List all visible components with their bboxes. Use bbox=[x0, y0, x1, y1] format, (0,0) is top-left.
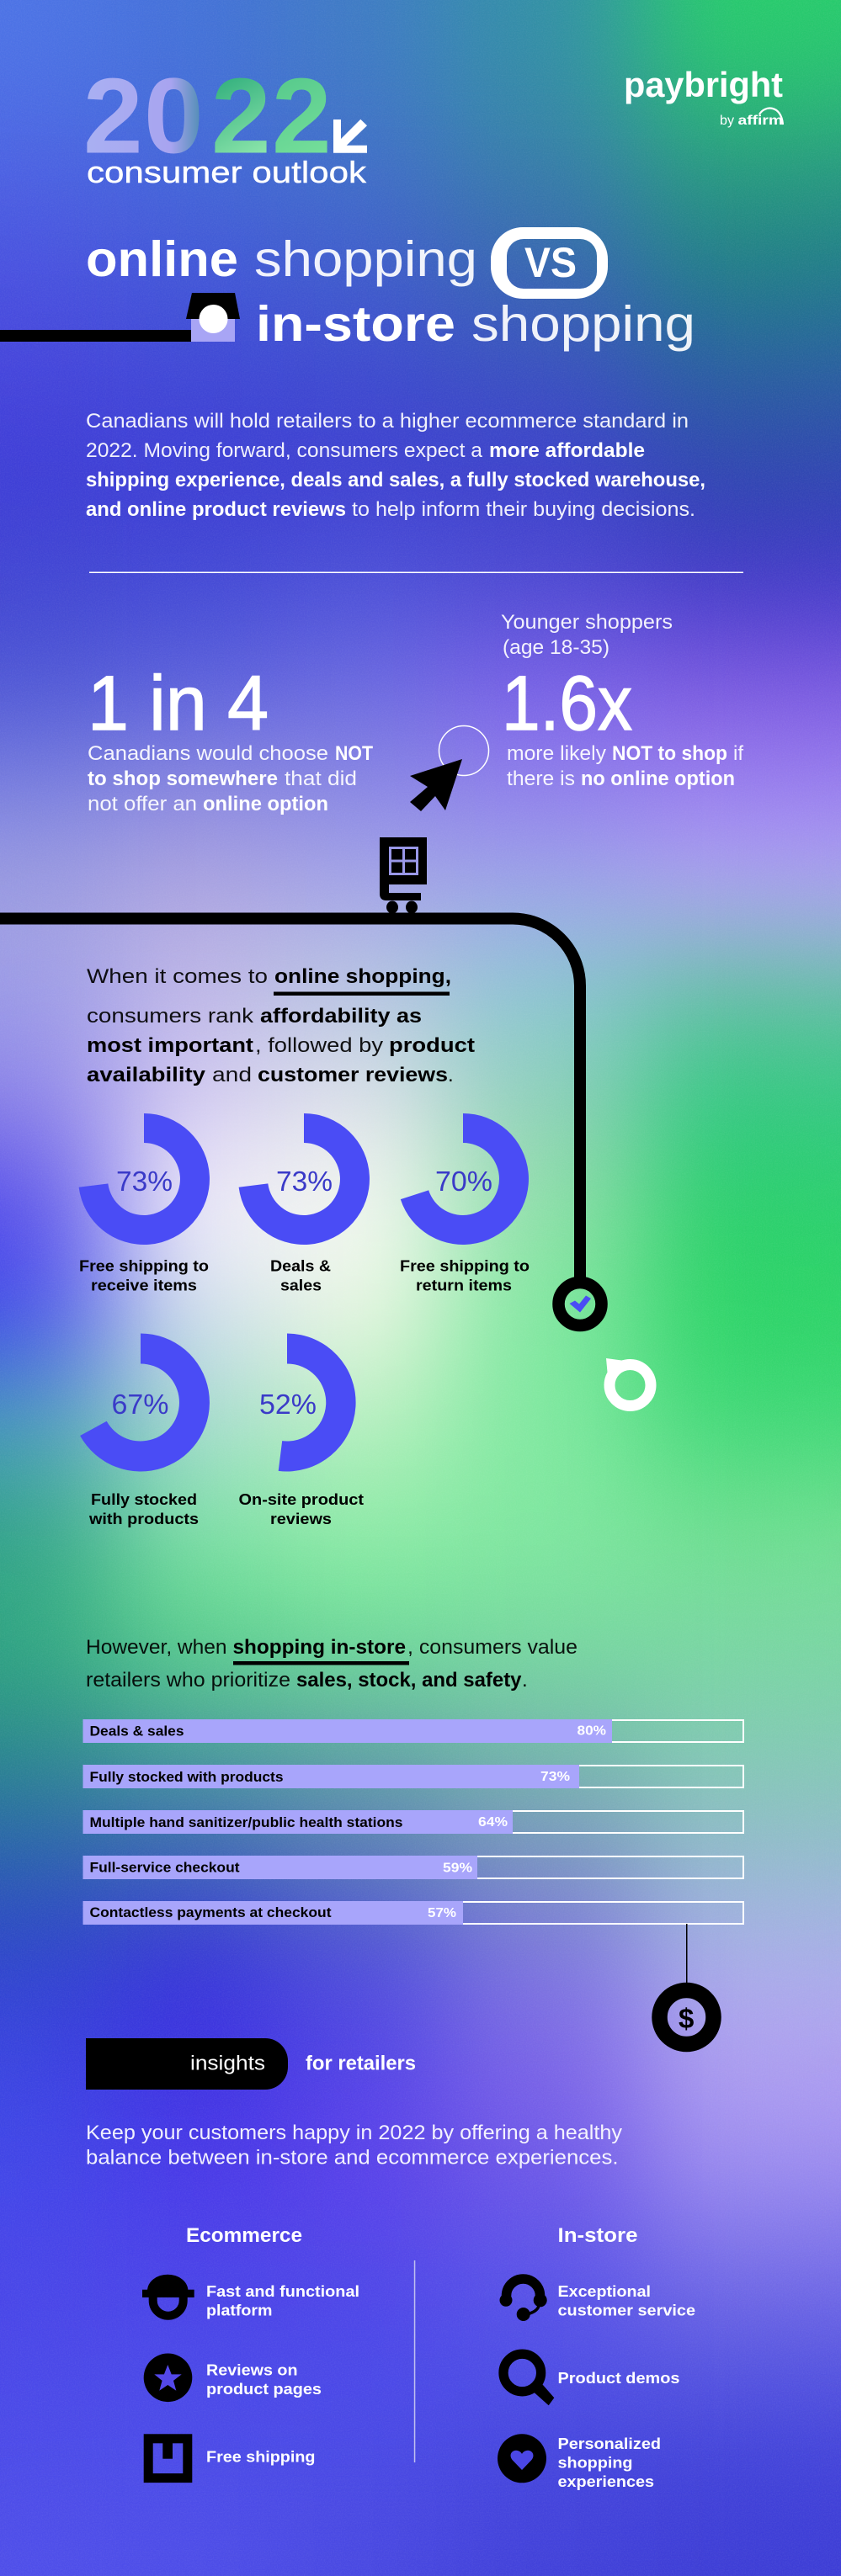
bar: fully stocked with products 73%: 73% bbox=[540, 1770, 570, 1784]
icon: check ring bbox=[559, 1283, 601, 1325]
icon: cursor with click ring bbox=[410, 725, 488, 811]
icon: down-left arrow bbox=[333, 120, 367, 153]
donut chart: deals and sales 73%: sales bbox=[280, 1276, 322, 1294]
stat: 1.6x younger shoppers: (age 18-35) bbox=[503, 636, 609, 659]
logo: paybright by affirm: affirm bbox=[737, 114, 783, 128]
icon: heart badge bbox=[498, 2434, 546, 2483]
stat: 1.6x younger shoppers: no online option bbox=[581, 767, 735, 790]
icon: shopping cart bbox=[380, 837, 427, 914]
stat: 1 in 4: not offer an bbox=[88, 793, 197, 815]
intro paragraph: Canadians will hold retailers to a higher ecommerce standard in bbox=[86, 410, 689, 433]
column heading: in-store: In-store bbox=[557, 2224, 638, 2247]
donut chart: free shipping to return items 70%: return items bbox=[416, 1276, 512, 1294]
donut chart: on-site product reviews 52%: 52% bbox=[259, 1389, 317, 1420]
item: reviews on product pages: Reviews on bbox=[206, 2361, 298, 2378]
item: reviews on product pages bbox=[144, 2353, 322, 2402]
icon: hanging dollar coin: $ bbox=[679, 2003, 694, 2034]
stat: 1.6x younger shoppers: if bbox=[733, 742, 743, 765]
online shopping intro text: affordability as bbox=[260, 1005, 422, 1028]
heading: insights for retailers: insights bbox=[190, 2052, 265, 2075]
title: 2022 consumer outlook: 0 bbox=[144, 56, 204, 175]
online shopping intro text: and bbox=[212, 1064, 252, 1086]
title: 2022 consumer outlook bbox=[83, 56, 367, 189]
stat: 1 in 4: 1 in 4 bbox=[88, 661, 269, 746]
stat: 1 in 4: NOT bbox=[335, 742, 373, 765]
item: free shipping: Free shipping bbox=[206, 2447, 315, 2466]
logo: paybright by affirm: by bbox=[720, 114, 734, 128]
item: personalized shopping experiences: Personalized bbox=[557, 2435, 661, 2452]
stat: 1.6x younger shoppers bbox=[501, 611, 743, 790]
heading: online shopping vs in-store shopping: shopping bbox=[254, 231, 477, 287]
in-store intro text bbox=[86, 1636, 578, 1692]
donut chart: on-site product reviews 52% bbox=[239, 1333, 364, 1527]
in-store intro text: However, when bbox=[86, 1636, 227, 1659]
bar: full-service checkout 59% bbox=[83, 1856, 743, 1879]
donut chart: free shipping to receive items 73%: receive items bbox=[91, 1276, 197, 1294]
online shopping intro text: online shopping, bbox=[274, 965, 451, 988]
logo: paybright by affirm: paybright bbox=[624, 65, 783, 104]
item: exceptional customer service: Exceptional bbox=[557, 2282, 651, 2300]
intro paragraph: to help inform their buying decisions. bbox=[352, 498, 695, 521]
stat: 1.6x younger shoppers: Younger shoppers bbox=[501, 611, 673, 634]
in-store intro text: sales, stock, and safety bbox=[296, 1669, 522, 1692]
item: fast and functional platform: platform bbox=[206, 2301, 273, 2319]
intro paragraph: more affordable bbox=[489, 439, 645, 462]
column heading: ecommerce: Ecommerce bbox=[186, 2224, 302, 2247]
heading: online shopping vs in-store shopping: shopping bbox=[471, 296, 695, 352]
title: 2022 consumer outlook: consumer outlook bbox=[87, 155, 367, 189]
stat: 1 in 4: online option bbox=[203, 793, 328, 815]
bar: deals and sales 80%: 80% bbox=[578, 1724, 606, 1739]
donut chart: free shipping to receive items 73%: 73% bbox=[116, 1166, 173, 1197]
donut chart: free shipping to receive items 73%: Free shipping to bbox=[79, 1257, 209, 1274]
donut chart: free shipping to return items 70%: Free shipping to bbox=[400, 1257, 530, 1274]
item: personalized shopping experiences bbox=[498, 2434, 661, 2490]
bar: deals and sales 80%: Deals & sales bbox=[89, 1724, 184, 1739]
bar: multiple hand sanitizer stations 64% bbox=[83, 1810, 743, 1834]
in-store intro text: retailers who prioritize bbox=[86, 1669, 290, 1692]
heading: insights for retailers bbox=[86, 2038, 416, 2090]
donut chart: free shipping to return items 70%: 70% bbox=[435, 1166, 492, 1197]
icon: box bbox=[148, 2438, 188, 2478]
online shopping intro text bbox=[87, 965, 475, 1086]
donut chart: fully stocked with products 67%: 67% bbox=[111, 1389, 168, 1420]
insights paragraph: Keep your customers happy in 2022 by offering a healthy bbox=[86, 2122, 622, 2144]
icon: white speech ring bbox=[606, 1358, 651, 1405]
stat: 1.6x younger shoppers: NOT to shop bbox=[612, 742, 727, 765]
heading: online shopping vs in-store shopping: in-store bbox=[256, 296, 455, 352]
donut chart: deals and sales 73%: Deals & bbox=[270, 1257, 331, 1274]
heading: online shopping vs in-store shopping: online bbox=[86, 231, 238, 287]
item: fast and functional platform bbox=[142, 2275, 359, 2319]
item: personalized shopping experiences: shopping bbox=[557, 2454, 633, 2471]
intro paragraph: 2022. Moving forward, consumers expect a bbox=[86, 439, 483, 462]
heading: insights for retailers: for retailers bbox=[306, 2052, 416, 2075]
insights paragraph: balance between in-store and ecommerce experiences. bbox=[86, 2146, 618, 2170]
vs badge: VS bbox=[524, 239, 577, 286]
donut chart: on-site product reviews 52%: reviews bbox=[270, 1510, 332, 1527]
stat: 1 in 4: that did bbox=[285, 767, 357, 790]
donut chart: fully stocked with products 67%: Fully stocked bbox=[91, 1490, 197, 1508]
intro paragraph bbox=[86, 410, 705, 521]
online shopping intro text: . bbox=[448, 1064, 454, 1086]
icon: star badge bbox=[144, 2353, 192, 2402]
donut chart: deals and sales 73%: 73% bbox=[276, 1166, 333, 1197]
bar: multiple hand sanitizer stations 64%: 64% bbox=[478, 1815, 508, 1830]
online shopping intro text: consumers rank bbox=[87, 1005, 254, 1028]
in-store intro text: shopping in-store bbox=[232, 1636, 406, 1659]
donut chart: on-site product reviews 52%: On-site product bbox=[239, 1490, 364, 1508]
vs badge bbox=[491, 227, 608, 299]
stat: 1 in 4: to shop somewhere bbox=[88, 767, 278, 790]
title: 2022 consumer outlook: 2 bbox=[272, 56, 332, 175]
bar: full-service checkout 59%: Full-service checkout bbox=[89, 1860, 240, 1875]
bar: contactless payments at checkout 57%: Contactless payments at checkout bbox=[89, 1905, 332, 1920]
in-store intro text: . bbox=[522, 1669, 528, 1692]
title: 2022 consumer outlook: 2 bbox=[211, 56, 271, 175]
donut chart: fully stocked with products 67%: with products bbox=[88, 1510, 199, 1527]
item: free shipping bbox=[148, 2438, 315, 2478]
icon: hard hat bbox=[142, 2275, 194, 2316]
intro paragraph: and online product reviews bbox=[86, 498, 346, 521]
online shopping intro text: product bbox=[389, 1034, 475, 1057]
track line: top bend down to check bbox=[0, 919, 580, 1283]
track line into store bbox=[0, 330, 192, 342]
donut chart: free shipping to receive items 73% bbox=[79, 1113, 210, 1294]
bar: contactless payments at checkout 57%: 57% bbox=[428, 1906, 456, 1920]
stat: 1.6x younger shoppers: there is bbox=[507, 767, 575, 790]
item: product demos: Product demos bbox=[557, 2369, 680, 2387]
icon: store bbox=[186, 293, 240, 342]
item: exceptional customer service bbox=[500, 2279, 695, 2321]
online shopping intro text: , followed by bbox=[255, 1034, 383, 1057]
donut chart: fully stocked with products 67% bbox=[80, 1333, 210, 1527]
bar: fully stocked with products 73%: Fully stocked with products bbox=[89, 1770, 283, 1785]
title: 2022 consumer outlook: 2 bbox=[83, 56, 143, 175]
insights paragraph bbox=[86, 2122, 622, 2170]
bar: deals and sales 80% bbox=[83, 1719, 743, 1743]
stat: 1 in 4 bbox=[88, 661, 373, 815]
donut chart: free shipping to return items 70% bbox=[400, 1113, 530, 1294]
bar: full-service checkout 59%: 59% bbox=[443, 1862, 472, 1875]
logo: paybright by affirm bbox=[624, 65, 783, 128]
donut chart: deals and sales 73% bbox=[239, 1113, 370, 1294]
bar: fully stocked with products 73% bbox=[83, 1765, 743, 1788]
stat: 1.6x younger shoppers: 1.6x bbox=[502, 661, 632, 746]
icon: headset bbox=[500, 2279, 547, 2321]
bar: multiple hand sanitizer stations 64%: Multiple hand sanitizer/public health stations bbox=[89, 1815, 402, 1830]
in-store intro text: , consumers value bbox=[407, 1636, 578, 1659]
online shopping intro text: customer reviews bbox=[258, 1064, 448, 1086]
heading: online shopping vs in-store shopping bbox=[86, 227, 695, 352]
item: fast and functional platform: Fast and functional bbox=[206, 2282, 359, 2300]
item: exceptional customer service: customer service bbox=[557, 2301, 695, 2319]
item: product demos bbox=[503, 2354, 680, 2405]
bar: contactless payments at checkout 57% bbox=[83, 1901, 743, 1925]
stat: 1.6x younger shoppers: more likely bbox=[507, 742, 606, 765]
icon: hanging dollar coin bbox=[660, 1924, 714, 2044]
online shopping intro text: most important bbox=[87, 1034, 253, 1057]
stat: 1 in 4: Canadians would choose bbox=[88, 742, 328, 765]
item: personalized shopping experiences: experiences bbox=[557, 2472, 654, 2490]
intro paragraph: shipping experience, deals and sales, a fully stocked warehouse, bbox=[86, 469, 705, 491]
online shopping intro text: availability bbox=[87, 1064, 206, 1086]
icon: magnifier bbox=[503, 2354, 554, 2405]
online shopping intro text: When it comes to bbox=[87, 965, 268, 988]
item: reviews on product pages: product pages bbox=[206, 2380, 322, 2398]
